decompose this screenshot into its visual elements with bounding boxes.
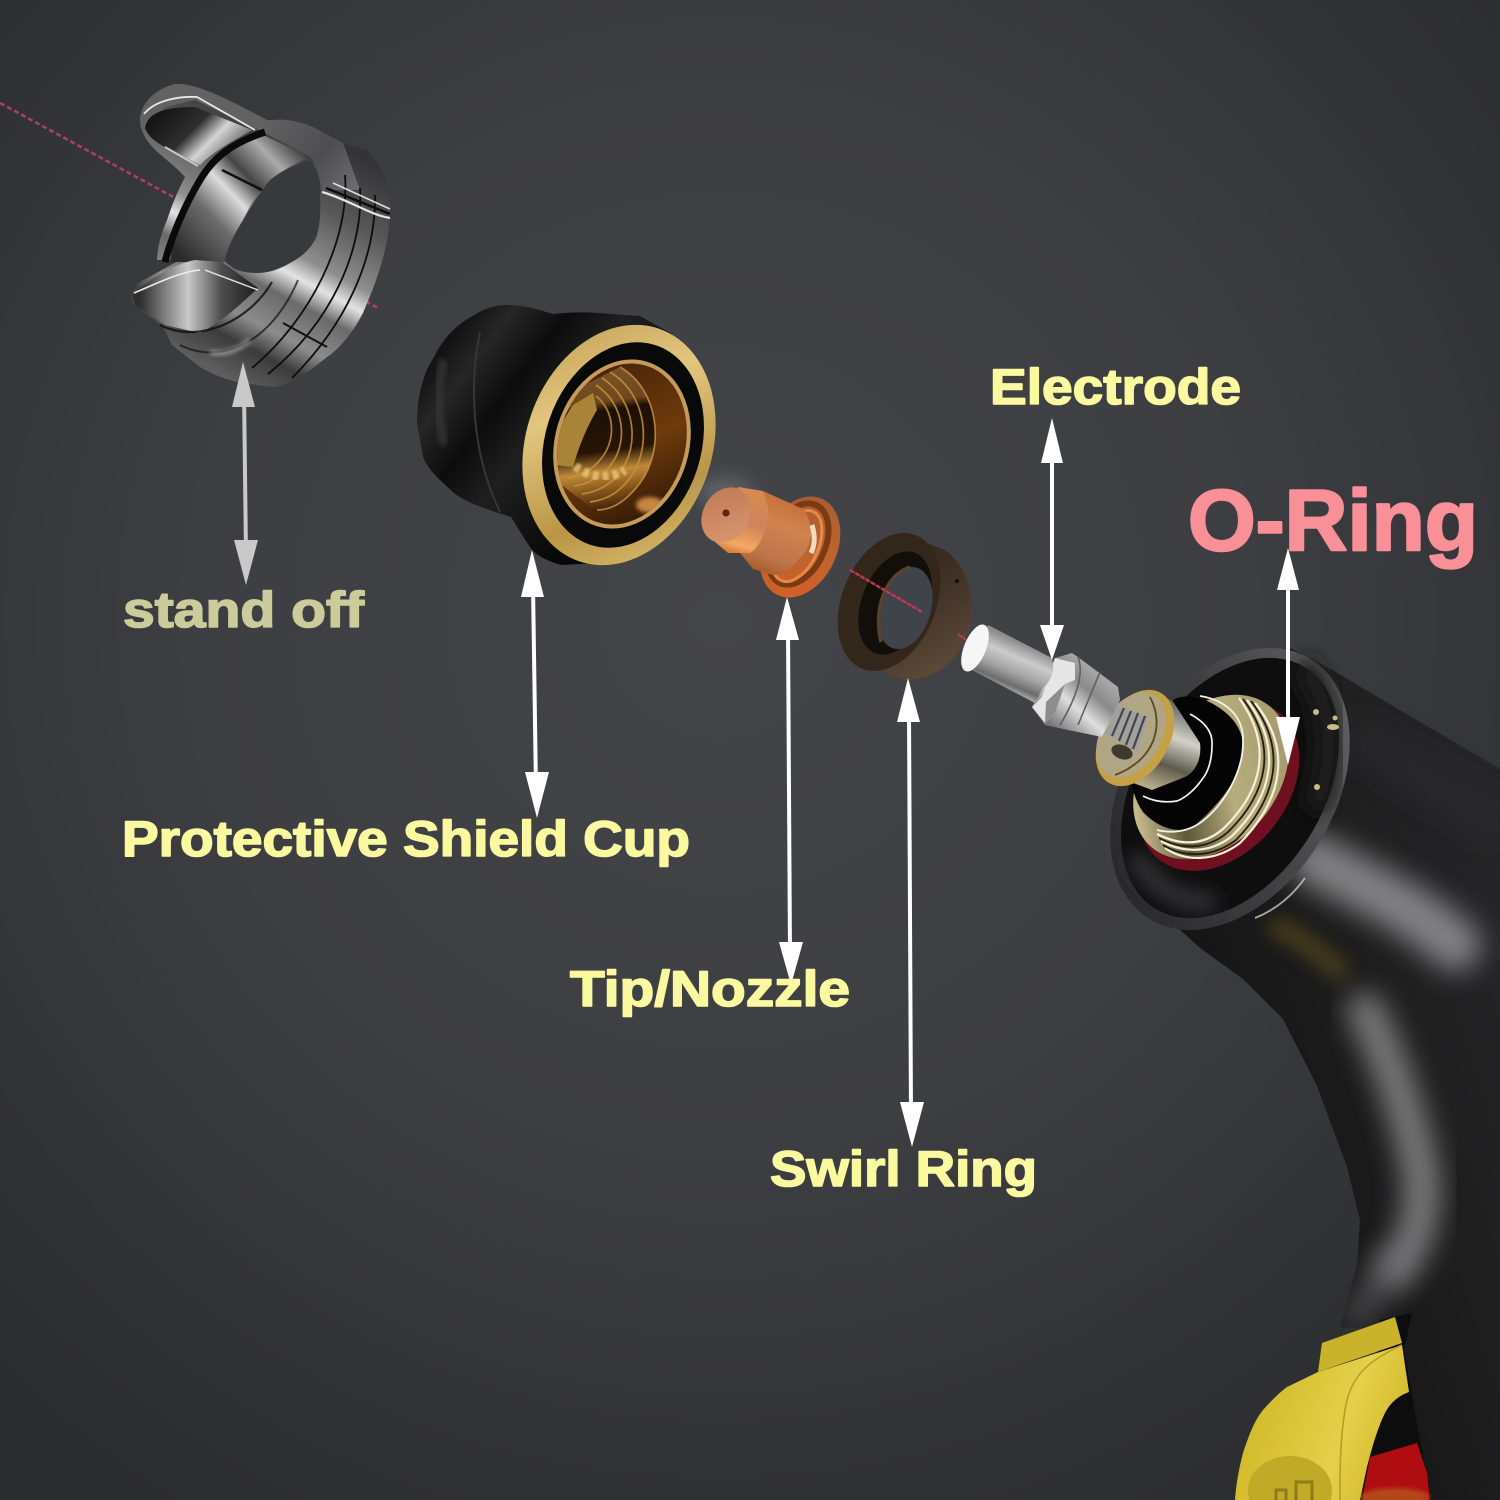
torch: recessed black well xyxy=(1131,696,1243,830)
label: O-ring: O-Ring xyxy=(1188,473,1478,569)
label: electrode: Electrode xyxy=(990,359,1241,415)
torch: right-side shading xyxy=(1350,730,1500,830)
torch: handle rim light xyxy=(1348,1250,1395,1325)
part: protective shield cup xyxy=(417,305,716,566)
arrow: stand off xyxy=(232,362,258,585)
torch: shoulder highlight xyxy=(1315,860,1455,945)
part: swirl ring xyxy=(818,518,971,686)
torch: electrode holder xyxy=(1125,695,1200,790)
trigger: logo recess xyxy=(1248,1456,1332,1500)
torch: yellow reflection xyxy=(1270,925,1345,975)
label: protective shield cup: Protective Shield Cup xyxy=(122,811,690,867)
shield cup: threaded interior xyxy=(557,364,687,524)
label: stand off: stand off xyxy=(123,582,364,638)
torch: small contact dots xyxy=(1313,709,1339,790)
part: stand off xyxy=(131,84,390,387)
shield cup: black inner ring xyxy=(516,321,730,569)
stand off: upper rim face xyxy=(140,84,360,190)
stand off: lower prong xyxy=(132,260,258,333)
swirl ring: see-through opening xyxy=(868,560,942,656)
stand off: upper prong xyxy=(145,107,252,165)
arrow: tip / nozzle xyxy=(776,597,803,985)
trigger: yellow guard xyxy=(1235,1345,1409,1500)
nozzle: flange xyxy=(744,483,856,611)
part: tip / nozzle xyxy=(692,478,856,611)
torch: muzzle interior xyxy=(1076,618,1384,958)
electrode: hex nut xyxy=(1032,653,1120,737)
trigger: yellow upper flap xyxy=(1318,1317,1402,1372)
arrow: protective shield cup xyxy=(521,550,549,818)
electrode: threaded stud xyxy=(1105,705,1148,752)
stand off: grooves xyxy=(252,175,375,378)
torch: muzzle lip xyxy=(1061,604,1399,974)
shield cup: black body xyxy=(417,305,672,565)
label: tip nozzle: Tip/Nozzle xyxy=(570,961,850,1017)
stand off: curved divider xyxy=(165,132,265,262)
nozzle: front end xyxy=(692,478,760,552)
electrode: shaft xyxy=(972,625,1053,703)
nozzle: tapered body xyxy=(740,491,811,575)
label: swirl ring: Swirl Ring xyxy=(770,1141,1037,1197)
trigger: dark recess xyxy=(1355,1313,1432,1500)
torch: grip body xyxy=(1125,648,1500,1500)
shield cup: gold ring xyxy=(491,298,747,592)
swirl ring: inner dark wall xyxy=(844,541,946,665)
part: yellow trigger guard with red trigger xyxy=(1235,1313,1432,1500)
trigger: red button xyxy=(1362,1443,1430,1500)
stand off: centre hole xyxy=(223,160,320,273)
shield cup: thin rim xyxy=(533,342,711,546)
red laser axis line, left xyxy=(0,103,378,308)
arrow: electrode xyxy=(1040,418,1064,660)
nozzle: front cylinder xyxy=(715,487,768,553)
arrow: swirl ring xyxy=(897,678,924,1147)
part: torch body with O-ring xyxy=(1096,648,1500,1500)
torch: O-ring (red) xyxy=(1106,670,1332,902)
arrow: O-ring xyxy=(1276,548,1300,765)
torch: threaded collar xyxy=(1101,664,1321,890)
part: electrode xyxy=(955,621,1148,752)
torch: handle highlight xyxy=(1365,1010,1422,1270)
swirl ring: side wall xyxy=(870,535,971,680)
stand off: inner band xyxy=(170,135,310,262)
electrode: end cap xyxy=(955,621,995,675)
torch: gold washer xyxy=(1080,676,1190,800)
swirl ring: front face xyxy=(818,518,960,686)
